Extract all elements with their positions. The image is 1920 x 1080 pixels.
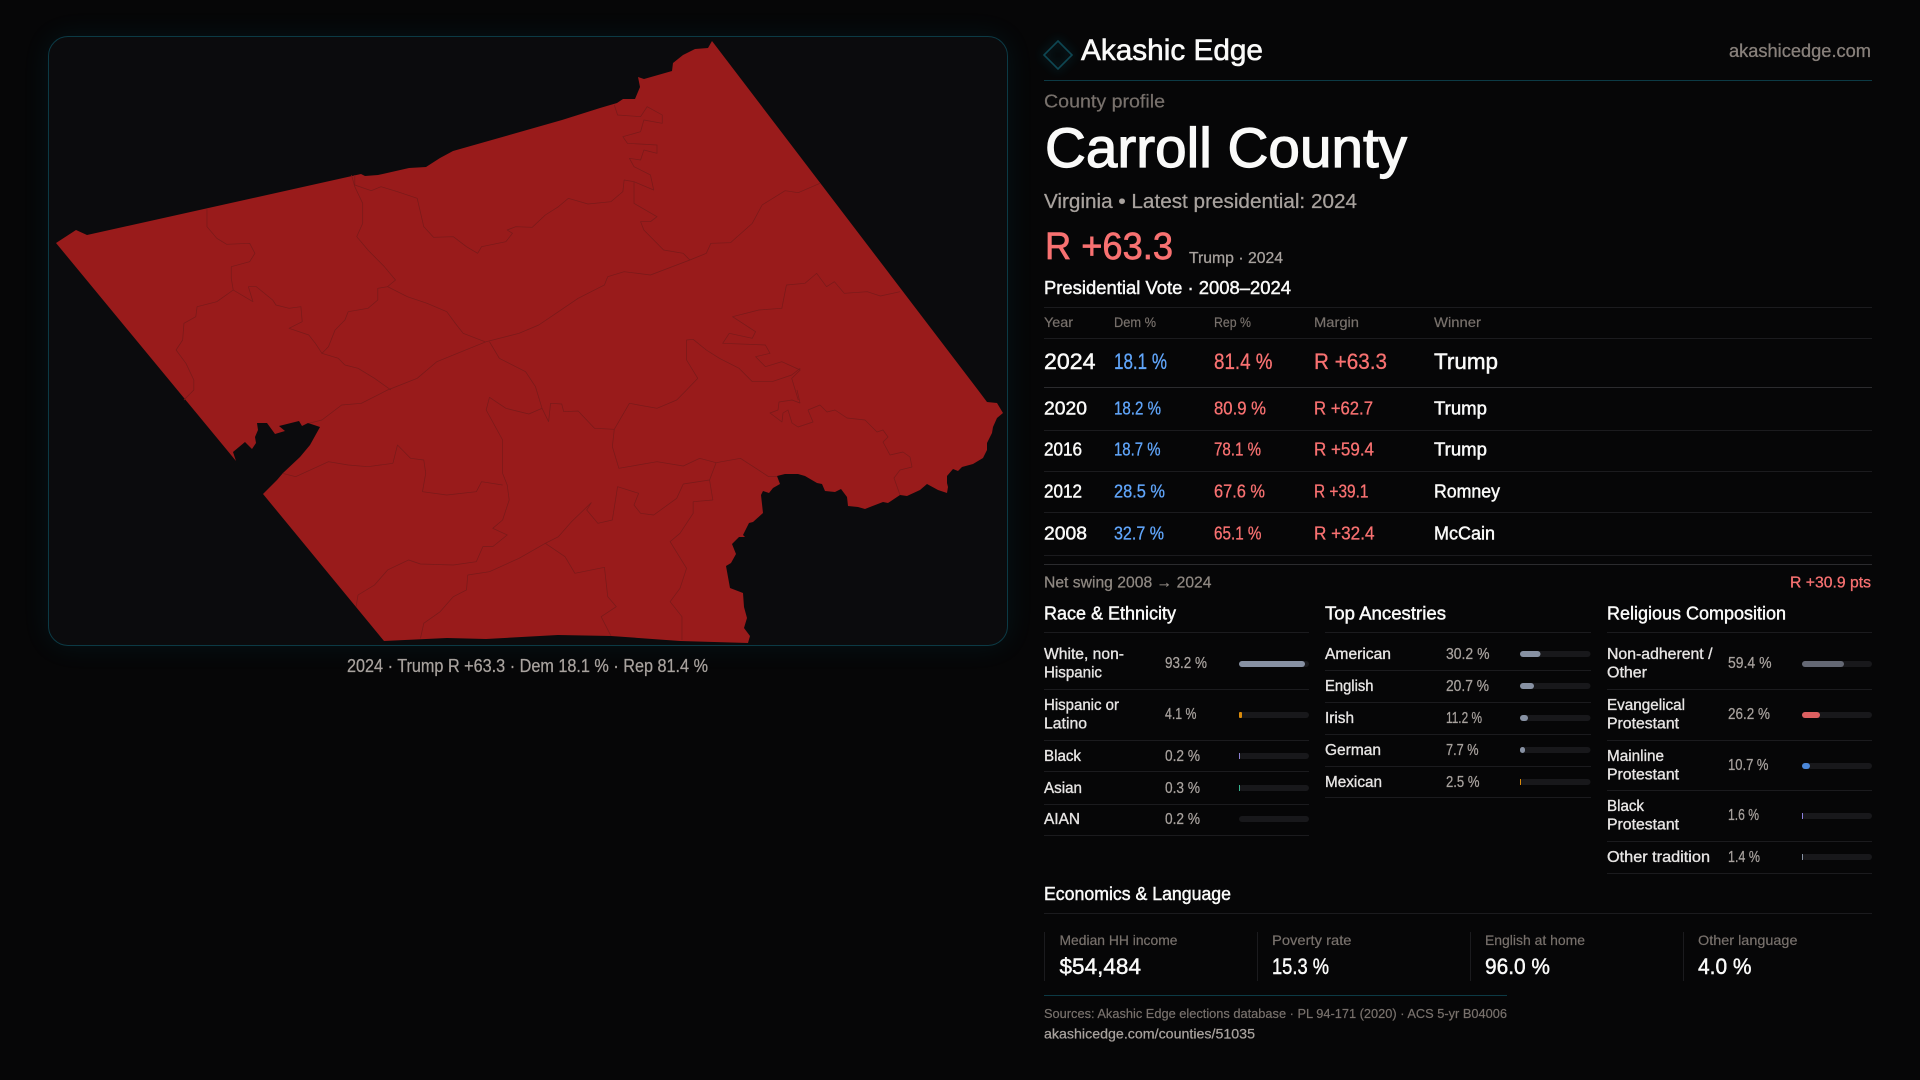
row: hispanic or latino: Hispanic or (1044, 697, 1119, 714)
row: non-adherent: Other (1607, 664, 1647, 682)
row 2016: Trump (1434, 440, 1487, 460)
row: mainline protestant: 10.7 % (1728, 757, 1769, 774)
row 2012: 28.5 % (1114, 482, 1165, 502)
row 2016: 2016 (1044, 440, 1082, 460)
table header row (1044, 314, 1481, 330)
row 2020 (1044, 398, 1487, 418)
row: evangelical protestant: 26.2 % (1728, 706, 1770, 723)
row: german: German (1325, 742, 1381, 759)
row: american: 30.2 % (1446, 646, 1490, 663)
row 2012: 2012 (1044, 482, 1082, 502)
stat: other language: Other language (1698, 932, 1798, 948)
row 2024: 18.1 % (1114, 349, 1167, 374)
panel: race and ethnicity: Race & Ethnicity (1044, 604, 1176, 624)
table: presidential results (1044, 308, 1872, 556)
footer: sources: akashicedge.com/counties/51035 (1044, 1026, 1255, 1042)
row: white non-hispanic (1044, 646, 1309, 682)
panel: economics and language (1044, 884, 1872, 981)
site url: akashicedge.com (1729, 41, 1871, 61)
subtitle: Virginia • Latest presidential: 2024 (1044, 191, 1357, 213)
row: asian: Asian (1044, 780, 1082, 797)
row: asian (1044, 780, 1309, 797)
table header row: Winner (1434, 314, 1481, 330)
heading: presidential vote: Presidential Vote · 2008–2024 (1044, 278, 1291, 298)
stat: median household income: Median HH income (1060, 932, 1178, 948)
row: black protestant (1607, 798, 1872, 834)
net swing row: Net swing 2008 → 2024 (1044, 574, 1212, 592)
stat: poverty rate: 15.3 % (1272, 954, 1329, 979)
row: other tradition (1607, 849, 1872, 866)
row 2020: R +62.7 (1314, 398, 1373, 418)
row: aian (1044, 811, 1309, 828)
panel: economics and language: Economics & Language (1044, 884, 1231, 904)
row: irish: Irish (1325, 710, 1354, 727)
row: hispanic or latino: 4.1 % (1165, 706, 1197, 723)
row: black: 0.2 % (1165, 748, 1200, 765)
footer: sources (1044, 1006, 1507, 1042)
row: mexican (1325, 774, 1590, 791)
table header row: Dem % (1114, 314, 1156, 330)
row: evangelical protestant (1607, 697, 1872, 732)
row: other tradition: Other tradition (1607, 849, 1710, 866)
panel: religious composition (1607, 604, 1872, 874)
row: german: 7.7 % (1446, 742, 1479, 759)
row 2016 (1044, 440, 1487, 460)
row: white non-hispanic: Hispanic (1044, 664, 1102, 682)
row: hispanic or latino (1044, 697, 1309, 732)
row: aian: 0.2 % (1165, 811, 1200, 828)
stat: english at home (1470, 932, 1585, 981)
row: evangelical protestant: Protestant (1607, 716, 1680, 732)
title: Carroll County: Carroll County (1045, 116, 1407, 179)
row: non-adherent: 59.4 % (1728, 655, 1772, 672)
row: german (1325, 742, 1590, 759)
footer: sources: Sources: Akashic Edge elections database · PL 94-171 (2020) · ACS 5-yr B04006 (1044, 1006, 1507, 1021)
table header row: Year (1044, 314, 1073, 330)
row: mainline protestant (1607, 748, 1872, 784)
map caption: 2024 · Trump R +63.3 · Dem 18.1 % · Rep 81.4 % (347, 656, 708, 676)
row: mexican: Mexican (1325, 774, 1382, 791)
row 2020: 18.2 % (1114, 398, 1161, 418)
row: mexican: 2.5 % (1446, 774, 1480, 791)
panel: top ancestries (1325, 604, 1591, 798)
row: black: Black (1044, 748, 1081, 765)
row 2012: Romney (1434, 482, 1500, 502)
row 2024 (1044, 349, 1498, 374)
row 2024: R +63.3 (1314, 349, 1387, 374)
map: precinct boundaries (176, 105, 900, 640)
row: white non-hispanic: White, non- (1044, 646, 1124, 663)
stat: english at home: English at home (1485, 932, 1585, 948)
eyebrow: county profile: County profile (1044, 92, 1165, 112)
row 2008 (1044, 524, 1495, 544)
row: english: 20.7 % (1446, 678, 1489, 695)
stat: median household income: $54,484 (1060, 954, 1141, 979)
row: black (1044, 748, 1309, 765)
row: evangelical protestant: Evangelical (1607, 697, 1685, 714)
row 2024: 2024 (1044, 349, 1096, 374)
row: asian: 0.3 % (1165, 780, 1200, 797)
header: brand bar (1044, 34, 1871, 69)
row 2008: R +32.4 (1314, 524, 1374, 544)
row: aian: AIAN (1044, 811, 1080, 828)
brand name: Akashic Edge (1081, 34, 1263, 67)
panel: race and ethnicity (1044, 604, 1309, 836)
map: Carroll County shape (56, 41, 1003, 643)
row 2008: 32.7 % (1114, 524, 1164, 544)
stat: other language (1684, 932, 1798, 981)
row: american: American (1325, 646, 1391, 663)
stat: median household income (1044, 932, 1178, 981)
row: english: English (1325, 678, 1374, 695)
headline margin: Trump · 2024 (1189, 250, 1283, 267)
table header row: Margin (1314, 314, 1359, 330)
row: other tradition: 1.4 % (1728, 849, 1760, 866)
row: mainline protestant: Protestant (1607, 766, 1680, 784)
row 2024: 81.4 % (1214, 349, 1272, 374)
row 2012: R +39.1 (1314, 482, 1368, 502)
row: non-adherent (1607, 646, 1872, 682)
panel: religious composition: Religious Composition (1607, 604, 1786, 624)
row: irish: 11.2 % (1446, 710, 1482, 727)
row: black protestant: Protestant (1607, 816, 1680, 834)
row: non-adherent: Non-adherent / (1607, 646, 1713, 663)
row 2020: Trump (1434, 398, 1487, 418)
map: southeast creek boundaries (770, 390, 912, 495)
row 2012 (1044, 482, 1500, 502)
row 2016: 78.1 % (1214, 440, 1261, 460)
table header row: Rep % (1214, 314, 1251, 330)
row: black protestant: 1.6 % (1728, 807, 1759, 824)
row: hispanic or latino: Latino (1044, 716, 1087, 732)
row: irish (1325, 710, 1590, 727)
stat: poverty rate (1258, 932, 1352, 981)
row: black protestant: Black (1607, 798, 1644, 815)
row: english (1325, 678, 1590, 695)
row 2016: R +59.4 (1314, 440, 1374, 460)
stat: poverty rate: Poverty rate (1272, 932, 1352, 948)
row 2024: Trump (1434, 349, 1498, 374)
row 2020: 2020 (1044, 398, 1087, 418)
stat: other language: 4.0 % (1698, 954, 1752, 979)
net swing row: R +30.9 pts (1790, 574, 1871, 592)
net swing row (1044, 574, 1871, 592)
row 2016: 18.7 % (1114, 440, 1160, 460)
row: mainline protestant: Mainline (1607, 748, 1664, 765)
headline margin: R +63.3 (1045, 226, 1173, 268)
row: american (1325, 646, 1590, 663)
row: white non-hispanic: 93.2 % (1165, 655, 1207, 672)
headline margin (1045, 226, 1283, 268)
icon: diamond logo (1044, 41, 1072, 69)
row 2008: 2008 (1044, 524, 1087, 544)
row 2020: 80.9 % (1214, 398, 1266, 418)
stat: english at home: 96.0 % (1485, 954, 1550, 979)
row 2012: 67.6 % (1214, 482, 1265, 502)
panel: county map frame (48, 36, 1008, 646)
row 2008: 65.1 % (1214, 524, 1262, 544)
row 2008: McCain (1434, 524, 1495, 544)
panel: top ancestries: Top Ancestries (1325, 604, 1446, 624)
